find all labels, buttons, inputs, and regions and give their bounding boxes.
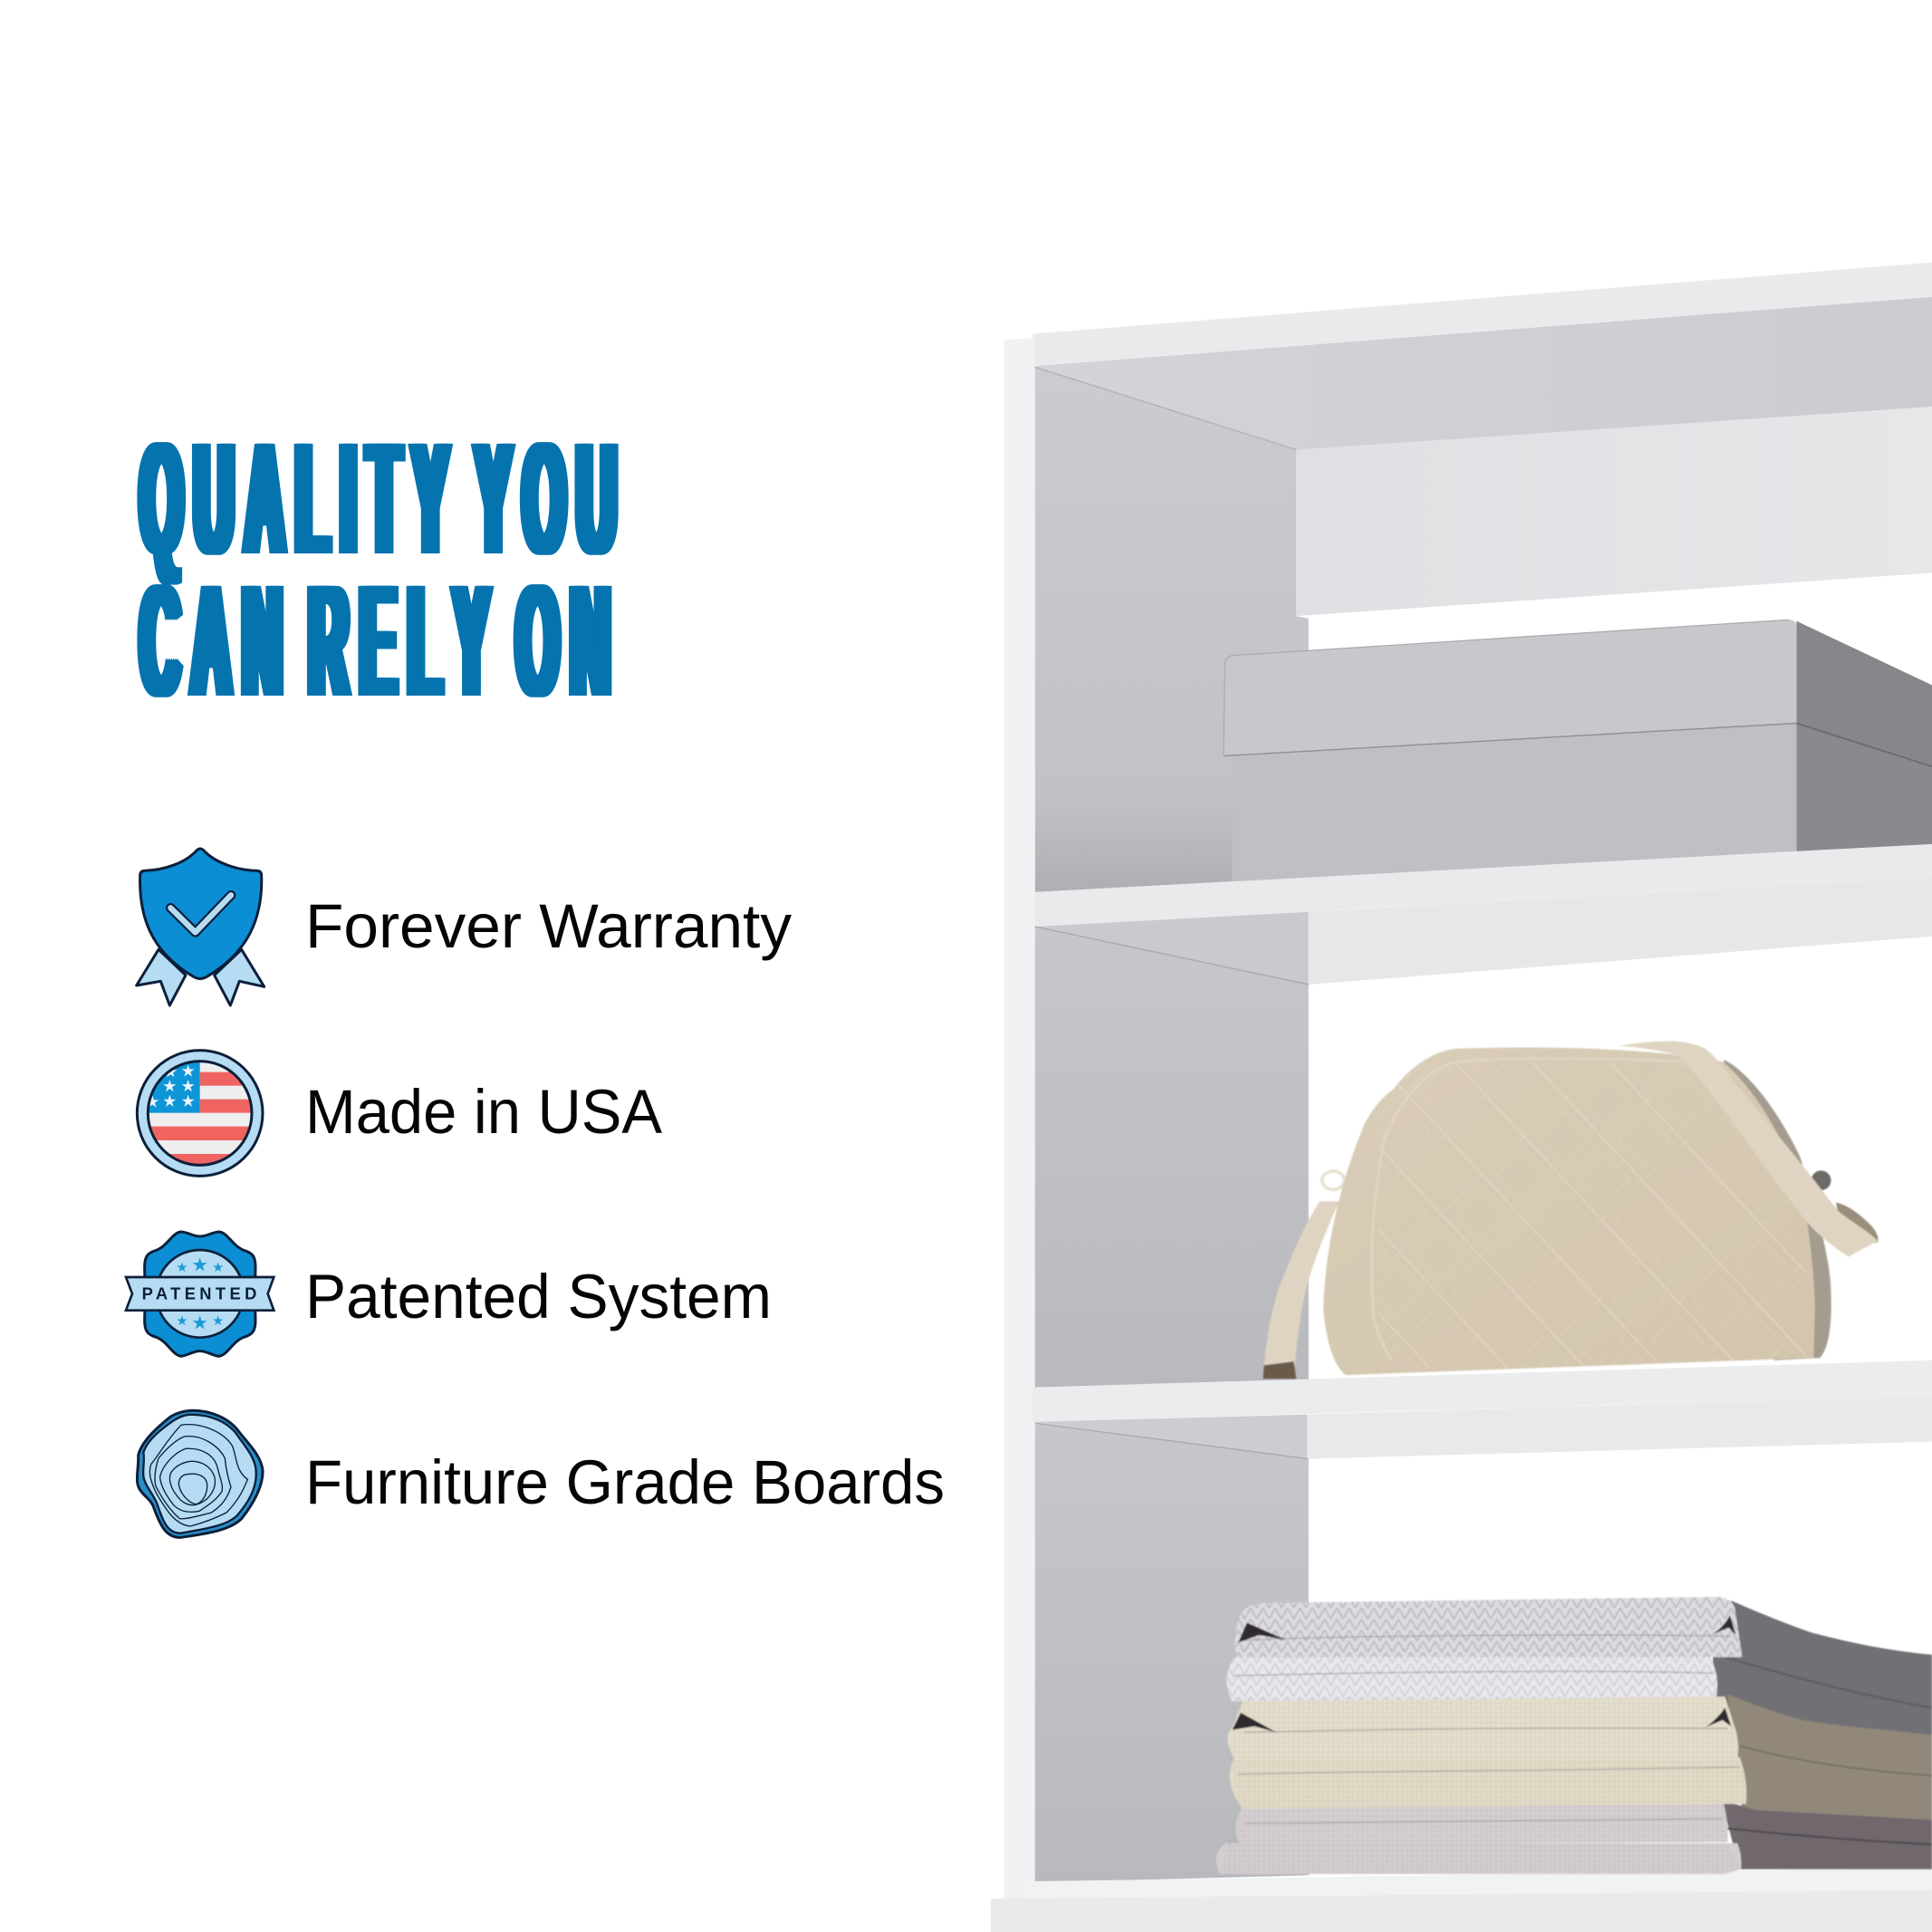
icon: wood rings <box>137 1410 263 1537</box>
label: patented system: Patented System <box>305 1262 772 1331</box>
checkmark outline <box>170 895 231 932</box>
right ribbon <box>215 949 264 1005</box>
growth rings <box>149 1425 247 1526</box>
box lid seam <box>1224 724 1796 756</box>
bag back shadow side <box>1724 1060 1831 1360</box>
lower side panel <box>1035 927 1309 1392</box>
left post <box>1004 338 1035 1904</box>
icon: usa flag badge <box>137 1051 263 1176</box>
heading: QUALITY YOU <box>140 410 628 588</box>
herringbone texture two <box>1226 1658 1717 1702</box>
inner ring <box>148 1062 252 1165</box>
herringbone texture one <box>1235 1597 1743 1658</box>
panel: shelving unit <box>991 263 1932 1932</box>
heading: CAN RELY ON <box>140 553 622 730</box>
strap end <box>1263 1361 1296 1379</box>
fold shadows <box>1232 1615 1736 1733</box>
wood face <box>143 1415 256 1533</box>
strap knob <box>1812 1170 1831 1190</box>
flag <box>149 1062 250 1164</box>
mauve towel side <box>1721 1800 1932 1870</box>
mauve towel crease <box>1727 1829 1932 1844</box>
middle shelf two <box>1033 1360 1932 1459</box>
seal body <box>145 1232 255 1356</box>
box lid side <box>1796 621 1932 766</box>
grey towel crease <box>1717 1655 1932 1707</box>
box lid front <box>1224 620 1796 755</box>
towel one <box>1235 1597 1743 1658</box>
upper panel seam <box>1035 367 1296 450</box>
bark <box>137 1410 263 1537</box>
label: made in usa: Made in USA <box>305 1077 662 1147</box>
folded towels <box>1216 1597 1932 1874</box>
seal stars <box>177 1257 223 1329</box>
grey towel side <box>1713 1600 1932 1762</box>
tan towel crease <box>1740 1746 1932 1775</box>
back panel <box>1296 407 1932 616</box>
bag piping <box>1372 1059 1690 1361</box>
bottom side panel <box>1035 1423 1309 1883</box>
bag body <box>1323 1048 1815 1375</box>
tan towel side <box>1727 1694 1932 1842</box>
box lid outline <box>1224 620 1789 755</box>
shield <box>140 849 262 978</box>
box base front <box>1232 715 1796 882</box>
box base side <box>1796 722 1932 852</box>
strap end behind <box>1836 1203 1878 1251</box>
right strap <box>1619 1041 1878 1257</box>
towel six <box>1216 1843 1741 1874</box>
bag ring <box>1322 1171 1344 1189</box>
checkmark fill <box>170 895 231 932</box>
box side seam <box>1796 724 1932 766</box>
ceiling underside of top board <box>1035 297 1932 451</box>
fold lines <box>1232 1635 1740 1823</box>
label: forever warranty: Forever Warranty <box>305 891 792 961</box>
icon: patented seal <box>126 1232 274 1356</box>
quilting <box>1378 1062 1806 1368</box>
seal centre <box>156 1250 244 1338</box>
feature list <box>305 891 945 1517</box>
label: furniture grade boards: Furniture Grade Boards <box>305 1447 945 1517</box>
towel five <box>1235 1799 1727 1844</box>
left ribbon <box>137 949 186 1005</box>
upper side panel <box>1035 366 1309 892</box>
bottom shelf <box>991 1868 1932 1932</box>
handbag <box>1263 1041 1878 1379</box>
towel two <box>1226 1658 1717 1702</box>
towel three <box>1227 1697 1738 1760</box>
knit texture <box>1220 1698 1746 1874</box>
top board front edge <box>1033 263 1932 366</box>
seal label: PATENTED <box>142 1283 256 1302</box>
towel four <box>1230 1757 1746 1809</box>
left strap <box>1264 1201 1340 1365</box>
storage box <box>1224 620 1932 882</box>
middle shelf one <box>1035 844 1932 985</box>
icon: warranty shield <box>137 849 264 1005</box>
outer ring <box>137 1051 263 1176</box>
seal ribbon <box>126 1277 274 1311</box>
heading <box>137 410 628 730</box>
